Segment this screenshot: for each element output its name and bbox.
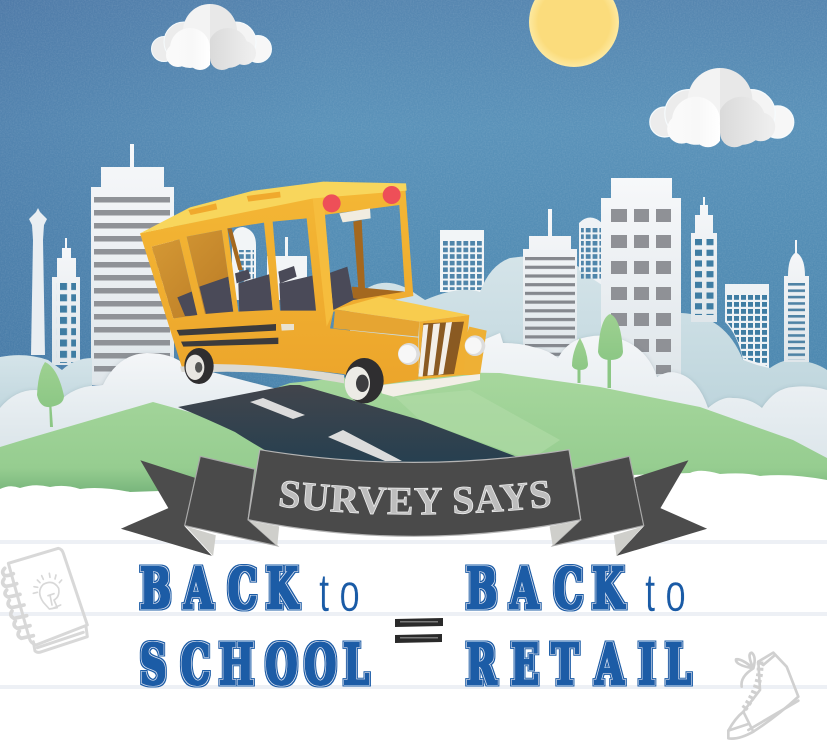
road: [178, 385, 525, 470]
heading: back to retail: [466, 556, 691, 698]
heading: back to school: [140, 556, 369, 698]
right fender: [453, 327, 487, 375]
buildings centre and right: [350, 178, 827, 440]
seats: [177, 266, 367, 316]
buildings left: [29, 144, 174, 385]
bumpers: [382, 374, 480, 397]
interior panels: [152, 230, 233, 318]
side stripes: [177, 324, 278, 347]
to: to: [319, 562, 360, 623]
retail: RETAIL: [466, 632, 691, 698]
banner: [121, 449, 707, 556]
large tower: [601, 178, 681, 376]
front pillar: [313, 196, 333, 327]
striped tower: [523, 209, 577, 362]
lightbulb: [33, 573, 62, 609]
icon: paper cloud left: [152, 4, 272, 70]
banner left tail: [121, 460, 212, 556]
trees: [37, 314, 623, 427]
banner title: SURVEY SAYS: [279, 480, 550, 515]
tower: [29, 208, 47, 355]
to: to: [645, 562, 686, 623]
front wheel: [345, 358, 384, 403]
buildings behind bus: [232, 227, 307, 300]
bus body: [140, 183, 418, 385]
road dashes: [250, 398, 305, 419]
right large tree: [598, 314, 623, 388]
tall striped tower: [91, 144, 174, 385]
right small tree: [572, 338, 588, 383]
equals sign: [395, 618, 443, 643]
domed tower: [784, 240, 809, 362]
back: BACK: [140, 556, 299, 622]
banner folds: [186, 521, 643, 556]
back: BACK: [466, 556, 626, 622]
banner left middle: [185, 456, 277, 546]
paper clouds left: [0, 353, 300, 450]
torn paper white area: [0, 471, 827, 742]
grid building: [440, 230, 484, 292]
lights and sign: [323, 194, 341, 212]
low grid tower: [725, 284, 769, 368]
banner right tail: [616, 460, 707, 556]
roof: [140, 182, 407, 233]
notebook rule lines: [0, 540, 827, 689]
headlights: [398, 343, 420, 365]
hood: [335, 297, 469, 322]
grille: [418, 315, 469, 379]
icon: paper cloud right: [650, 68, 794, 147]
icon: sneaker: [728, 653, 798, 739]
sky background: [0, 0, 827, 420]
back clouds right: [350, 256, 827, 440]
icon: sun: [529, 0, 619, 67]
banner centre: [248, 450, 581, 536]
green hills: [0, 372, 827, 500]
narrow windowed tower: [52, 238, 80, 365]
school bus: [140, 182, 487, 403]
paper clouds right: [400, 333, 827, 470]
left tree: [37, 362, 64, 427]
behind windowed tower: [579, 218, 602, 285]
icon: notebook: [3, 548, 87, 652]
banner right middle: [553, 456, 644, 546]
slim tower: [691, 197, 717, 322]
spiral rings: [3, 568, 33, 638]
rear wheel: [184, 348, 214, 384]
page area: [0, 471, 827, 742]
school: SCHOOL: [140, 632, 369, 698]
